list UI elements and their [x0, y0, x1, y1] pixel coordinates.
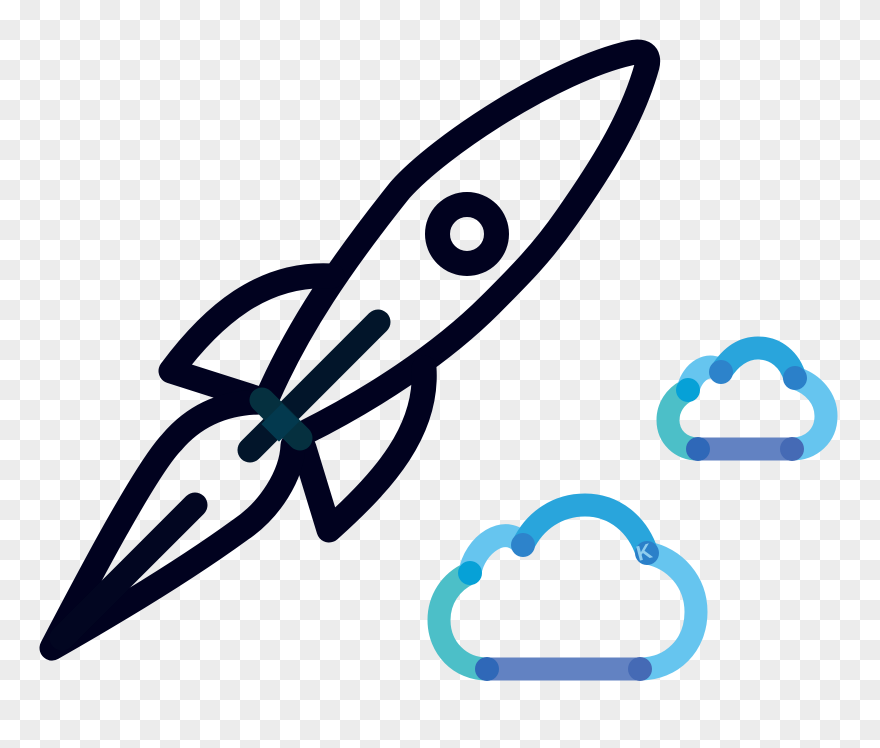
right arc — [640, 553, 696, 669]
watermark letter: K — [634, 540, 655, 566]
window ring — [438, 204, 496, 264]
joint dots — [676, 360, 807, 461]
short crossing bar — [262, 400, 300, 438]
right fin — [304, 368, 424, 530]
left arc — [668, 390, 698, 449]
bar crossing highlight — [279, 421, 282, 424]
rocket axis bar — [250, 322, 378, 450]
left arc — [439, 573, 487, 669]
upper left arc — [470, 536, 523, 573]
icon: large cloud — [439, 505, 696, 681]
left fin — [171, 276, 332, 400]
joint dots — [458, 533, 659, 681]
top arc — [523, 505, 647, 553]
upper left arc — [688, 367, 721, 390]
flame outline — [52, 402, 293, 648]
flame centre line — [62, 505, 195, 638]
right arc — [792, 378, 826, 449]
rocket body — [268, 52, 648, 433]
bottom bar — [487, 658, 640, 680]
icon: small cloud — [668, 348, 826, 461]
bottom bar — [698, 438, 792, 460]
top arc — [721, 348, 795, 378]
icon: rocket — [52, 52, 648, 648]
